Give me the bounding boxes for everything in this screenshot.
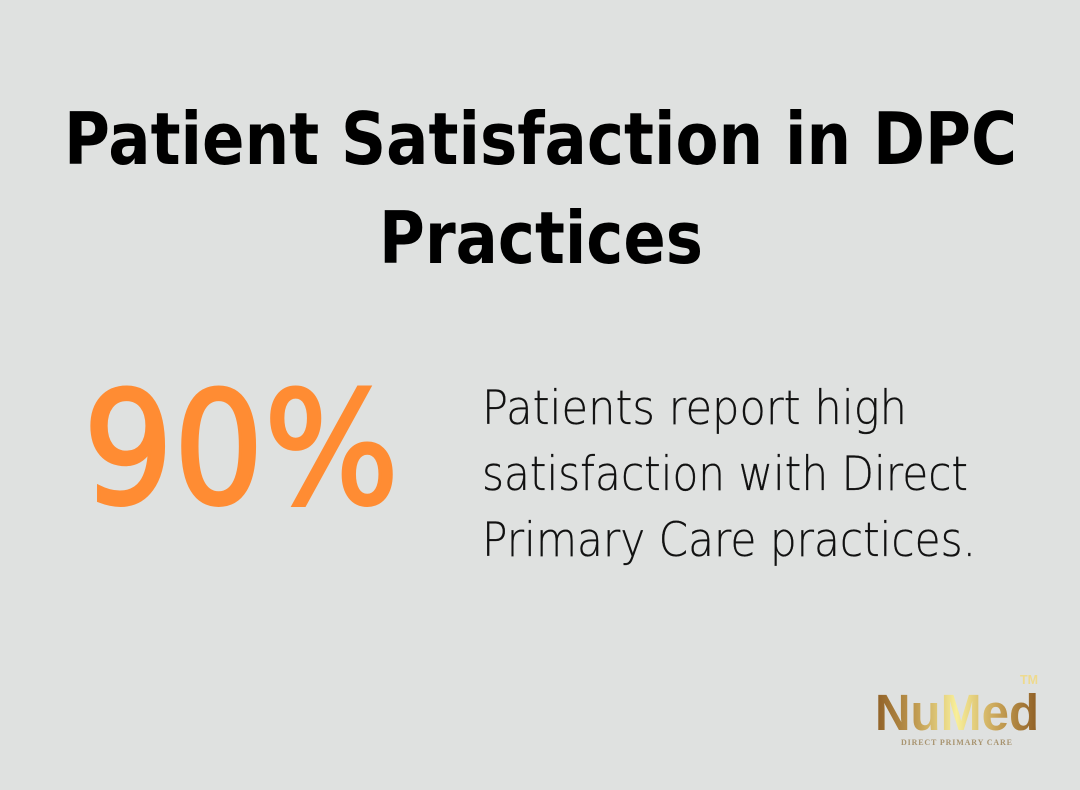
description text: Patients report high xyxy=(482,381,907,436)
title xyxy=(64,97,1017,280)
logo: NuMed Direct Primary Care: TM xyxy=(1020,672,1038,687)
logo: NuMed Direct Primary Care: DIRECT PRIMARY CARE xyxy=(901,738,1012,747)
description text: satisfaction with Direct xyxy=(482,447,968,502)
description text xyxy=(482,381,976,568)
logo: NuMed Direct Primary Care: NuMed xyxy=(875,684,1039,741)
title: Practices xyxy=(379,196,703,280)
statistic: 90%: 90% xyxy=(83,358,399,540)
description text: Primary Care practices. xyxy=(482,513,976,568)
